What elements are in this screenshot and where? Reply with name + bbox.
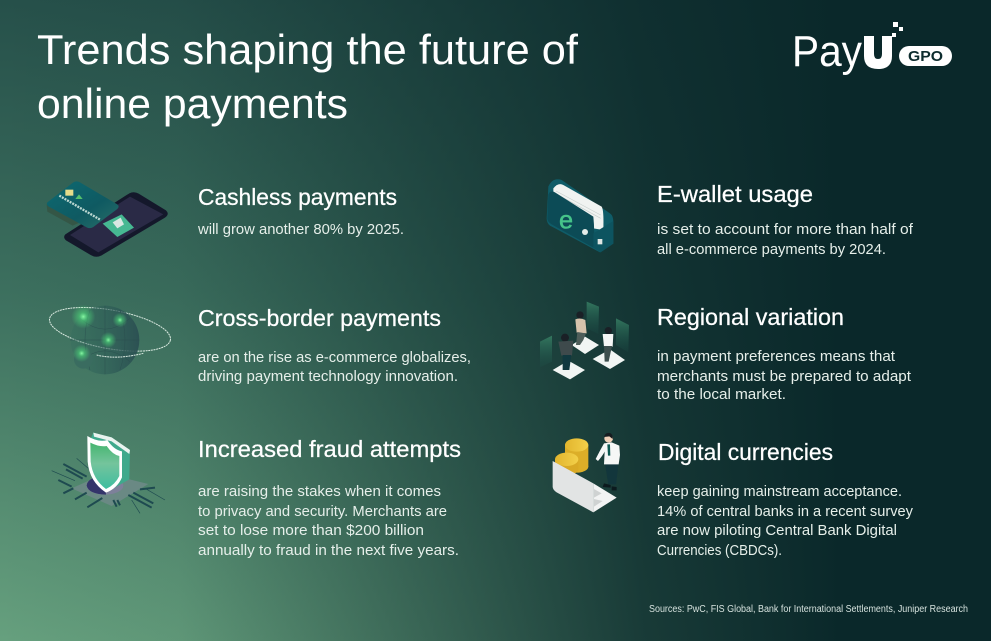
icon: coins, laptop and person xyxy=(553,433,620,512)
icon: three people on platforms xyxy=(540,302,629,379)
panel: increased fraud attempts xyxy=(52,433,461,559)
body text: driving payment technology innovation. xyxy=(198,369,458,385)
body text: merchants must be prepared to adapt xyxy=(657,369,911,385)
body text xyxy=(198,350,471,385)
title: online payments xyxy=(37,80,348,127)
panel: digital currencies xyxy=(553,433,914,559)
body text: all e-commerce payments by 2024. xyxy=(657,242,886,258)
icon: card over phone xyxy=(47,181,168,257)
heading: Digital currencies xyxy=(658,439,833,465)
panel: cross-border payments xyxy=(46,300,471,385)
title: Trends shaping the future of xyxy=(37,26,578,73)
heading: Cashless payments xyxy=(198,184,397,210)
heading: Cross-border payments xyxy=(198,305,441,331)
body text: annually to fraud in the next five years. xyxy=(198,543,459,559)
body text: keep gaining mainstream acceptance. xyxy=(657,484,902,500)
body text: to the local market. xyxy=(657,387,786,403)
body text: set to lose more than $200 billion xyxy=(198,523,424,539)
body text: Currencies (CBDCs). xyxy=(657,543,782,559)
logo: PayU GPO: GPO xyxy=(908,48,943,65)
body text: will grow another 80% by 2025. xyxy=(197,222,404,238)
icon: wallet: e xyxy=(559,206,573,234)
logo: PayU GPO: Pay xyxy=(792,27,862,76)
body text: in payment preferences means that xyxy=(657,349,895,365)
body text xyxy=(657,222,914,258)
icon: wallet xyxy=(547,179,613,252)
body text xyxy=(657,349,911,403)
logo: PayU GPO xyxy=(792,22,952,76)
heading: E-wallet usage xyxy=(657,181,813,207)
icon: shield on chip xyxy=(52,433,165,513)
body text xyxy=(657,484,914,559)
body text: is set to account for more than half of xyxy=(657,222,914,238)
heading: Regional variation xyxy=(657,304,844,330)
body text: are on the rise as e-commerce globalizes, xyxy=(198,350,471,366)
panel: cashless payments xyxy=(47,181,404,257)
body text: to privacy and security. Merchants are xyxy=(198,504,447,520)
body text: are now piloting Central Bank Digital xyxy=(657,523,897,539)
body text: are raising the stakes when it comes xyxy=(198,484,441,500)
heading: Increased fraud attempts xyxy=(198,436,461,462)
body text: 14% of central banks in a recent survey xyxy=(657,504,914,520)
icon: globe with orbit xyxy=(46,300,174,374)
title xyxy=(37,26,578,127)
body text xyxy=(198,484,459,559)
panel: regional variation xyxy=(540,302,911,403)
panel: e-wallet usage xyxy=(547,179,914,258)
